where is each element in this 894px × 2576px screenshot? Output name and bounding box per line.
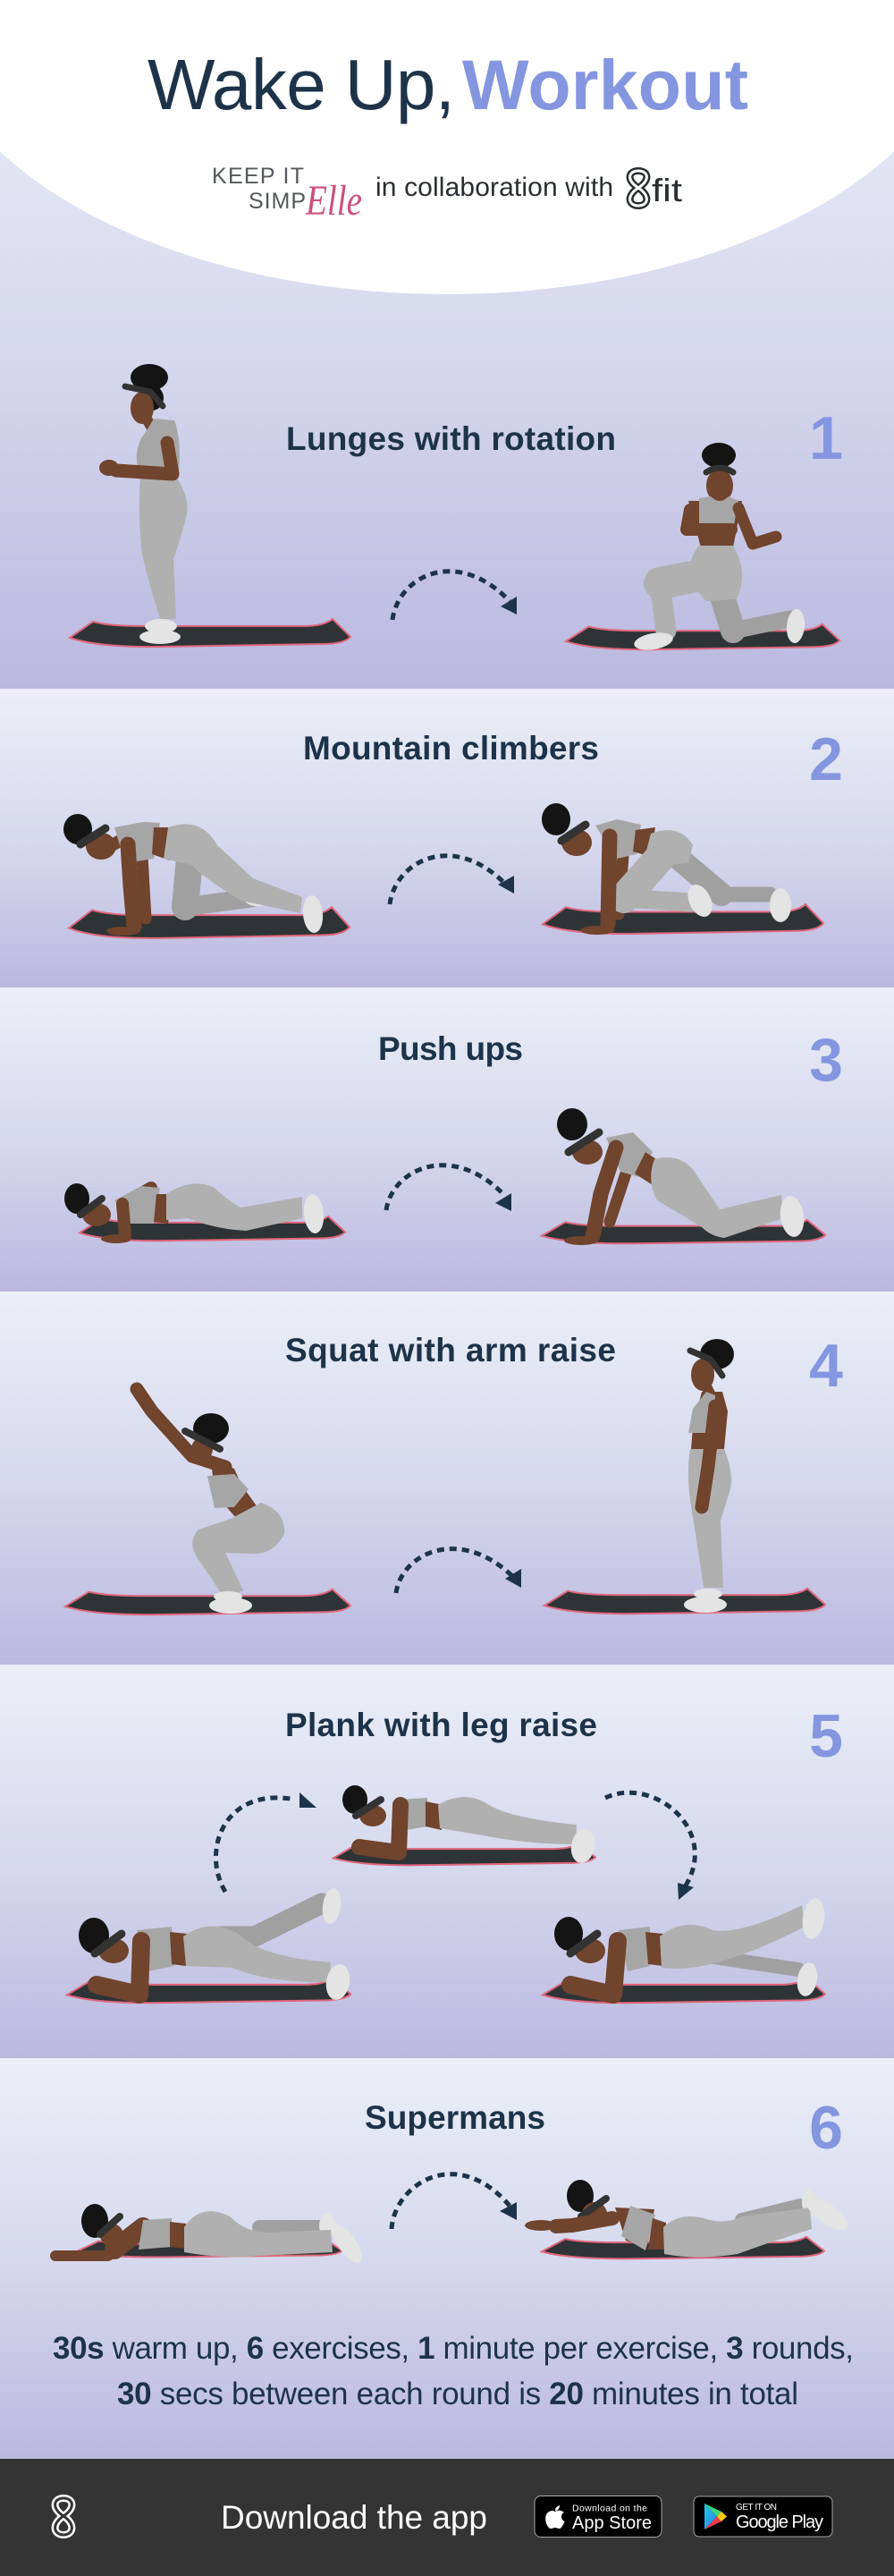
figure: push up down xyxy=(64,1183,345,1243)
logo: Keep It SimpElle: Elle xyxy=(305,177,362,225)
app store badge: Download on the xyxy=(572,2504,647,2514)
arrow 2 xyxy=(390,856,514,904)
heading: exercise 3: Push ups xyxy=(378,1030,523,1067)
google play badge: Google Play xyxy=(736,2512,823,2532)
figure: mountain climber start xyxy=(63,814,350,938)
figure: plank right leg raise xyxy=(543,1897,827,2003)
arrow 4 xyxy=(396,1549,521,1593)
summary text: 30s warm up, 6 exercises, 1 minute per exercise, 3 rounds, xyxy=(53,2331,854,2366)
logo: Keep It SimpElle: KEEP IT xyxy=(212,164,304,189)
logo: Keep It SimpElle xyxy=(212,164,362,225)
number 2: 2 xyxy=(809,725,843,793)
arrow 3 xyxy=(386,1165,511,1211)
header white ellipse xyxy=(0,0,894,294)
summary text xyxy=(53,2331,854,2411)
logo: Keep It SimpElle: SIMP xyxy=(249,189,306,214)
google play badge xyxy=(694,2496,832,2537)
number 5: 5 xyxy=(809,1702,843,1770)
figure: forearm plank xyxy=(333,1785,597,1865)
figure: standing tall xyxy=(544,1339,825,1614)
title: Wake Up, xyxy=(148,45,455,124)
google play badge: GET IT ON xyxy=(736,2503,777,2512)
title xyxy=(148,45,748,124)
panel: section 2 background xyxy=(0,689,894,987)
number 6: 6 xyxy=(809,2094,843,2162)
summary text: 30 secs between each round is 20 minutes in total xyxy=(117,2377,798,2411)
logo: 8fit: fit xyxy=(652,172,682,208)
figure: lunge xyxy=(566,443,839,653)
arrow 6 xyxy=(392,2174,517,2229)
figure: plank left leg raise xyxy=(67,1887,352,2003)
number 4: 4 xyxy=(809,1332,843,1400)
figure: superman lying flat xyxy=(55,2204,367,2267)
panel: section 1 background xyxy=(0,0,894,689)
figure: push up top xyxy=(542,1108,825,1245)
figure: squat with arms raised xyxy=(65,1389,350,1614)
app store badge: App Store xyxy=(572,2513,652,2533)
figure: mountain climber knee in xyxy=(542,803,823,935)
heading: exercise 6: Supermans xyxy=(365,2099,545,2136)
app store badge xyxy=(535,2496,662,2537)
panel: section 5 background xyxy=(0,1665,894,2058)
panel: section 4 background xyxy=(0,1292,894,1665)
title: Workout xyxy=(462,45,748,124)
download text: Download the app xyxy=(221,2499,487,2536)
footer 8fit logo xyxy=(55,2498,72,2535)
panel: section 3 background xyxy=(0,987,894,1292)
heading: exercise 1: Lunges with rotation xyxy=(286,420,616,457)
heading: exercise 2: Mountain climbers xyxy=(303,730,599,767)
number 1: 1 xyxy=(809,404,843,472)
arrow 1 xyxy=(392,572,517,620)
logo: 8fit xyxy=(630,171,682,208)
arrow 5a xyxy=(215,1792,316,1892)
figure: standing on mat xyxy=(70,364,350,647)
figure: superman lifted xyxy=(525,2180,852,2258)
collaboration text: in collaboration with xyxy=(375,173,613,202)
footer bar xyxy=(0,2459,894,2576)
heading: exercise 4: Squat with arm raise xyxy=(285,1332,616,1368)
panel: section 6 background xyxy=(0,2058,894,2459)
number 3: 3 xyxy=(809,1026,843,1094)
heading: exercise 5: Plank with leg raise xyxy=(285,1707,597,1743)
arrow 5b xyxy=(605,1792,695,1900)
